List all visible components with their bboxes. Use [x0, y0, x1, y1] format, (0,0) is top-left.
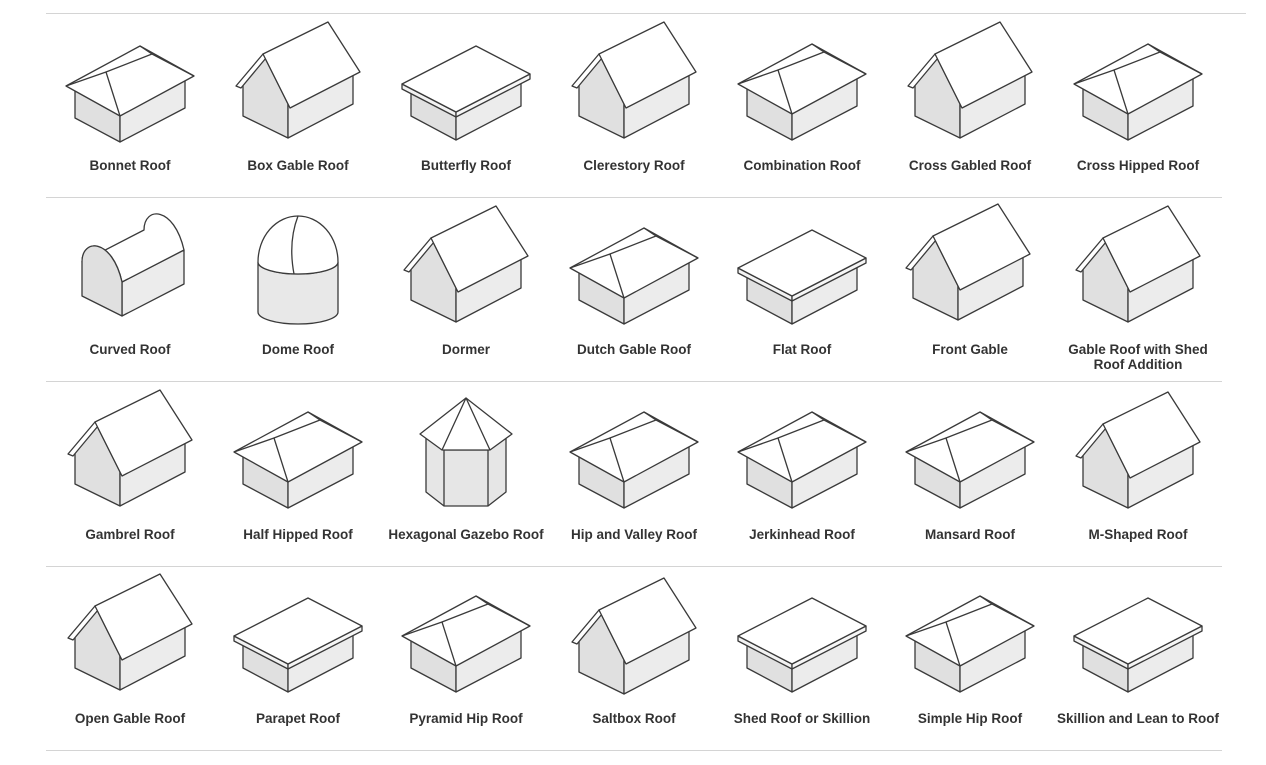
cell: Hexagonal Gazebo Roof [388, 398, 544, 542]
cell: Open Gable Roof: Open Gable Roof [75, 711, 186, 726]
cell: Curved Roof [82, 214, 184, 357]
cell: Gable Roof with Shed Roof Addition: Gable Roof with Shed [1068, 342, 1208, 357]
cell: Cross Hipped Roof [1074, 44, 1202, 173]
cell: Dutch Gable Roof [570, 228, 698, 357]
cell: Simple Hip Roof: Simple Hip Roof [918, 711, 1023, 726]
cell: Clerestory Roof: Clerestory Roof [583, 158, 685, 173]
cell: Pyramid Hip Roof [402, 596, 530, 726]
cell: Dome Roof: Dome Roof [262, 342, 334, 357]
cell: Butterfly Roof [402, 46, 530, 173]
cell: Saltbox Roof: Saltbox Roof [592, 711, 676, 726]
cell: Hexagonal Gazebo Roof: Hexagonal Gazebo Roof [388, 527, 544, 542]
cell: Hip and Valley Roof: Hip and Valley Roof [571, 527, 698, 542]
cell: Shed Roof or Skillion [734, 598, 870, 726]
cell: Saltbox Roof [572, 578, 696, 726]
cell: Gambrel Roof: Gambrel Roof [85, 527, 175, 542]
cell: Cross Gabled Roof [908, 22, 1032, 173]
cell: Shed Roof or Skillion: Shed Roof or Skillion [734, 711, 870, 726]
cell: Cross Hipped Roof: Cross Hipped Roof [1077, 158, 1200, 173]
cell: Skillion and Lean to Roof [1057, 598, 1220, 726]
cell: Curved Roof: Curved Roof [90, 342, 171, 357]
cell: Flat Roof: Flat Roof [773, 342, 832, 357]
cell: Flat Roof [738, 230, 866, 357]
cell: Box Gable Roof: Box Gable Roof [247, 158, 349, 173]
cell: Pyramid Hip Roof: Pyramid Hip Roof [409, 711, 523, 726]
cell: Open Gable Roof [68, 574, 192, 726]
cell: Parapet Roof: Parapet Roof [256, 711, 341, 726]
cell: Simple Hip Roof [906, 596, 1034, 726]
cell: Gable Roof with Shed Roof Addition [1068, 206, 1208, 372]
cell: Hip and Valley Roof [570, 412, 698, 542]
cell: Half Hipped Roof: Half Hipped Roof [243, 527, 353, 542]
cell: Cross Gabled Roof: Cross Gabled Roof [909, 158, 1032, 173]
cell: Clerestory Roof [572, 22, 696, 173]
cell: Gambrel Roof [68, 390, 192, 542]
cell: Front Gable: Front Gable [932, 342, 1008, 357]
cell: Front Gable [906, 204, 1030, 357]
cell: Dormer [404, 206, 528, 357]
cell: Dutch Gable Roof: Dutch Gable Roof [577, 342, 692, 357]
cell: Combination Roof: Combination Roof [744, 158, 861, 173]
cell: Gable Roof with Shed Roof Addition: Roof Addition [1094, 357, 1182, 372]
cell: Bonnet Roof: Bonnet Roof [90, 158, 171, 173]
cell: Mansard Roof: Mansard Roof [925, 527, 1016, 542]
cell: M-Shaped Roof: M-Shaped Roof [1088, 527, 1188, 542]
cell: Dormer: Dormer [442, 342, 491, 357]
cell: Dome Roof [258, 216, 338, 357]
cell: Butterfly Roof: Butterfly Roof [421, 158, 511, 173]
cell: Combination Roof [738, 44, 866, 173]
cell: Half Hipped Roof [234, 412, 362, 542]
cell: Jerkinhead Roof [738, 412, 866, 542]
cell: M-Shaped Roof [1076, 392, 1200, 542]
cell: Parapet Roof [234, 598, 362, 726]
cell: Box Gable Roof [236, 22, 360, 173]
cell: Jerkinhead Roof: Jerkinhead Roof [749, 527, 855, 542]
cell: Bonnet Roof [66, 46, 194, 173]
cell: Skillion and Lean to Roof: Skillion and Lean to Roof [1057, 711, 1220, 726]
cell: Mansard Roof [906, 412, 1034, 542]
